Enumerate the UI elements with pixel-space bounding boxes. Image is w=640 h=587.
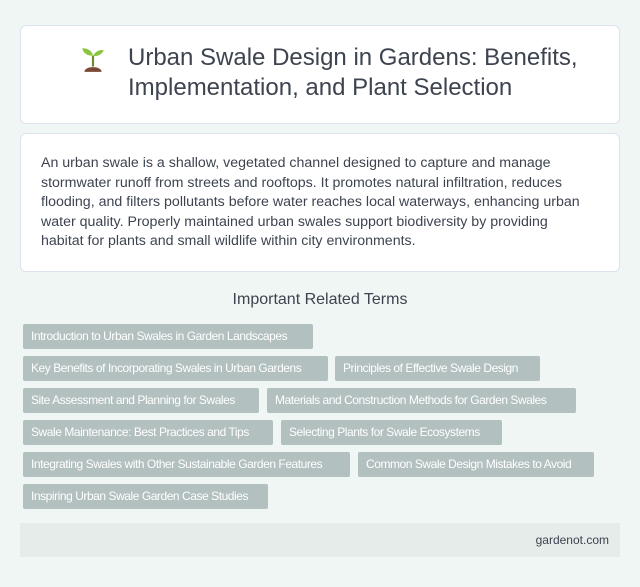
tag: Key Benefits of Incorporating Swales in Urban Gardens <box>31 361 301 375</box>
tag: Introduction to Urban Swales in Garden Landscapes <box>31 329 287 343</box>
tag <box>281 420 502 445</box>
tag: Site Assessment and Planning for Swales <box>31 393 235 407</box>
tag <box>23 324 313 349</box>
tag <box>23 452 350 477</box>
tag: Materials and Construction Methods for Garden Swales <box>275 393 546 407</box>
tag: Selecting Plants for Swale Ecosystems <box>289 425 480 439</box>
description text: An urban swale is a shallow, vegetated channel designed to capture and manage stormwater runoff from streets and rooftops. It promotes natural infiltration, reduces flooding, and filters pollutants before water reaches local waterways, enhancing urban water quality. Properly maintained urban swales support biodiversity by providing habitat for plants and small wildlife within city environments. <box>41 155 580 249</box>
tag <box>23 388 259 413</box>
title: Urban Swale Design in Gardens: Benefits, Implementation, and Plant Selection <box>128 44 578 101</box>
tag <box>267 388 576 413</box>
tag: Integrating Swales with Other Sustainable Garden Features <box>31 457 322 471</box>
tag <box>23 484 268 509</box>
description card <box>20 133 620 272</box>
header card <box>20 25 620 124</box>
tag <box>23 356 328 381</box>
tag: Common Swale Design Mistakes to Avoid <box>366 457 571 471</box>
tag <box>358 452 594 477</box>
footer text: gardenot.com <box>536 533 609 547</box>
tag: Swale Maintenance: Best Practices and Tips <box>31 425 249 439</box>
section heading: Important Related Terms <box>233 291 407 308</box>
tag: Principles of Effective Swale Design <box>343 361 518 375</box>
tag <box>335 356 540 381</box>
icon: seedling <box>82 48 104 72</box>
footer <box>20 523 620 557</box>
tag: Inspiring Urban Swale Garden Case Studies <box>31 489 248 503</box>
tag <box>23 420 273 445</box>
